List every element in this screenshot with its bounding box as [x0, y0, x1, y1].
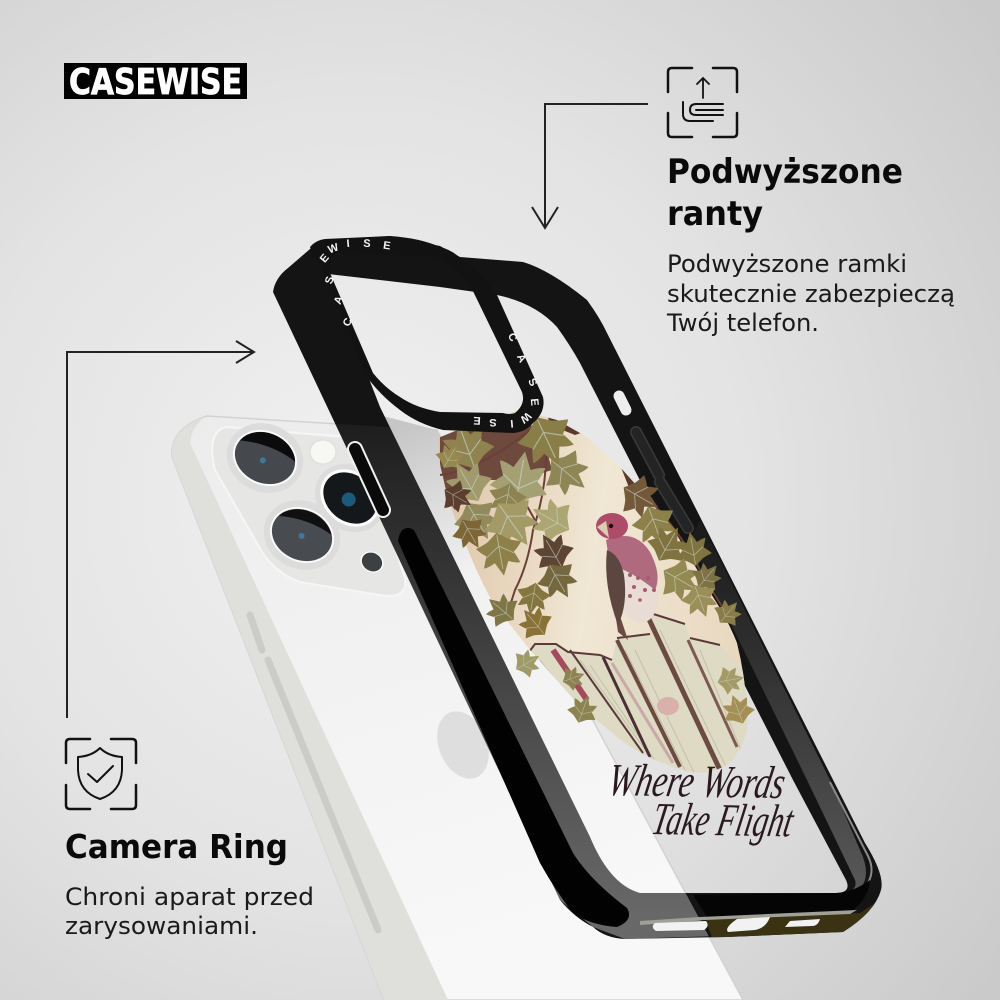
hand lettering [604, 755, 798, 847]
books and shadows [440, 405, 752, 790]
ring lettering: S [363, 238, 371, 250]
icon: raised edges [668, 68, 737, 137]
upper inner shade [360, 410, 560, 660]
text: camera ring description: Chroni aparat przed [65, 883, 314, 911]
logo shadow [428, 704, 498, 786]
text: raised edges description: Podwyższone ramki [667, 250, 907, 278]
side button window [355, 449, 383, 510]
charging and speaker ports [653, 917, 820, 932]
flash [310, 440, 336, 464]
ring lettering: E [528, 398, 540, 406]
ivy leaves [432, 405, 758, 729]
ring lettering: S [489, 416, 497, 428]
camera ring [310, 236, 544, 433]
ring lettering: I [346, 238, 350, 250]
ring lettering: C [505, 331, 519, 344]
ring lettering: A [514, 352, 528, 365]
text: raised edges description [666, 250, 955, 337]
heading: raised edges [667, 152, 903, 234]
ring lettering [318, 238, 540, 429]
white phone [172, 410, 743, 1000]
hand lettering: Where Words [604, 755, 790, 809]
arrow: top [532, 104, 648, 228]
volume buttons [636, 432, 688, 528]
arrow: left [67, 341, 254, 718]
heading: raised edges: Podwyższone [667, 152, 903, 192]
ring lettering: E [473, 414, 481, 426]
text: raised edges description: Twój telefon. [666, 309, 819, 337]
phone side band [172, 416, 448, 1000]
ring lettering: W [326, 241, 341, 256]
text: camera ring description [65, 883, 314, 940]
text: camera ring description: zarysowaniami. [65, 912, 258, 940]
icon: shield [66, 739, 136, 809]
camera plateau [212, 427, 405, 596]
microphone [357, 547, 387, 577]
lens 3 [301, 450, 399, 546]
port band [706, 904, 875, 938]
ring lettering: E [382, 240, 391, 252]
logo: CASEWISE [69, 62, 242, 103]
flower [657, 697, 679, 715]
ring lettering: S [323, 275, 337, 286]
illustration: bird on books [432, 405, 758, 790]
oval paper [438, 410, 748, 773]
bottom strip [693, 880, 870, 917]
side button [250, 615, 378, 930]
right band [690, 520, 866, 893]
ring lettering: E [318, 252, 332, 265]
ring lettering: W [517, 409, 533, 426]
mute switch [619, 396, 626, 410]
ring lettering: C [341, 316, 355, 329]
case frame [273, 236, 882, 945]
text: raised edges description: skutecznie zabezpieczą [667, 280, 955, 308]
bird [596, 513, 668, 640]
translucent overlay [336, 424, 709, 939]
ring lettering: S [525, 377, 539, 388]
lens 2 [253, 488, 351, 582]
hand lettering: Take Flight [648, 794, 798, 847]
heading: raised edges: ranty [667, 194, 763, 234]
black inner channel [398, 528, 629, 927]
vine stems [440, 430, 730, 620]
lens 1 [216, 411, 314, 505]
heading: camera ring: Camera Ring [65, 827, 288, 866]
ring lettering: I [510, 417, 514, 429]
ring lettering: A [332, 294, 346, 306]
